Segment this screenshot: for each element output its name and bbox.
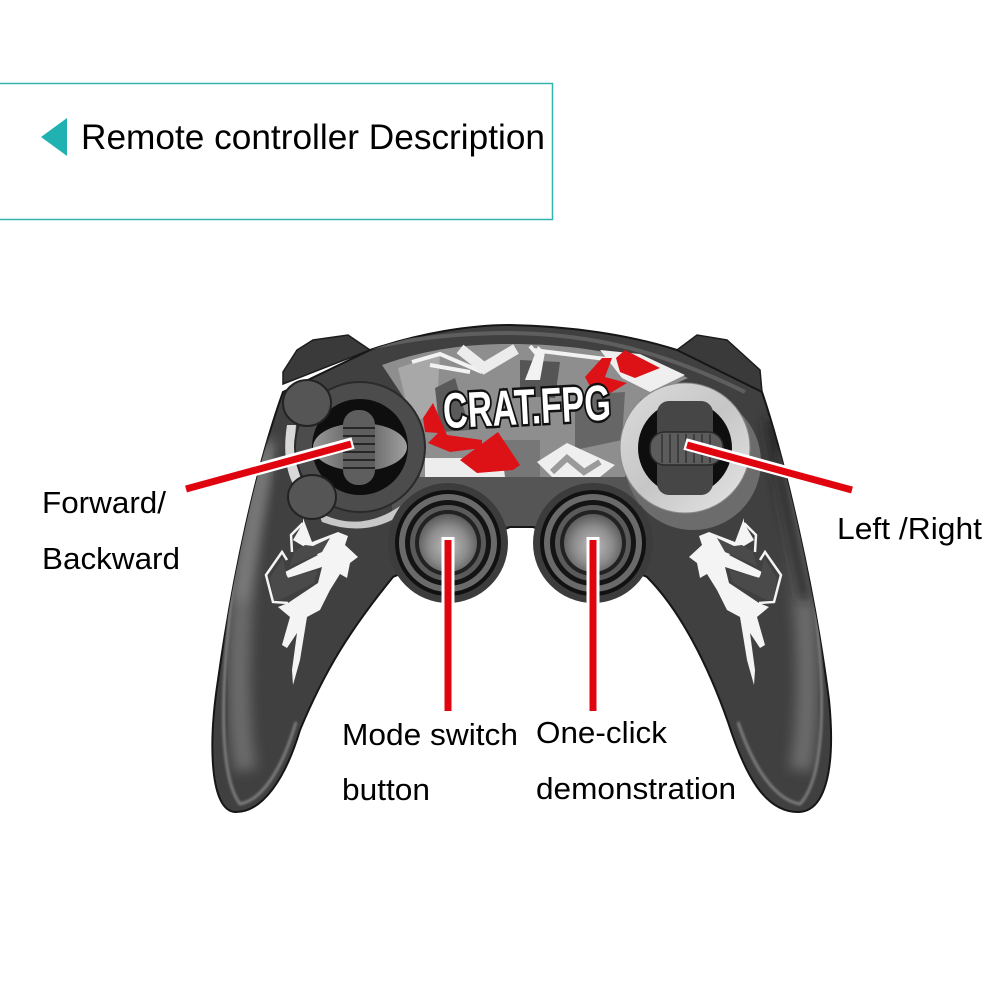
right joystick [533, 483, 653, 603]
left arrow decal [266, 518, 358, 685]
roller wheel [343, 410, 375, 485]
white script lines [412, 346, 630, 372]
left shoulder button [283, 335, 370, 384]
graffiti panel [382, 344, 688, 477]
pointer: forward/backward [186, 443, 353, 489]
pointer: mode switch [442, 537, 454, 711]
title text: Remote controller Description [81, 118, 545, 157]
label: forward/backward: Backward [42, 541, 180, 576]
label: left/right: Left /Right [837, 511, 982, 546]
pointer: left/right [685, 444, 852, 490]
white band [600, 350, 685, 392]
label: one-click demonstration: demonstration [536, 771, 736, 806]
graffiti logo: CRAT.FPG [441, 375, 612, 439]
label: mode switch button: Mode switch [342, 717, 518, 752]
right arrow decal [689, 518, 781, 685]
title panel [0, 84, 552, 220]
grip shading [224, 333, 821, 804]
right dial [620, 383, 761, 530]
label: forward/backward [42, 485, 180, 576]
right shoulder button [677, 335, 762, 392]
label: mode switch button [342, 717, 518, 807]
label: one-click demonstration: One-click [536, 715, 667, 750]
label: one-click demonstration [536, 715, 736, 806]
top V pattern [460, 349, 516, 368]
left joystick [388, 483, 508, 603]
controller illustration [212, 325, 831, 812]
icon: teal triangle [41, 118, 67, 156]
red chevrons [423, 403, 482, 452]
pointer: one-click demonstration [586, 537, 600, 711]
controller body [212, 325, 831, 812]
label: mode switch button: button [342, 772, 430, 807]
label: forward/backward: Forward/ [42, 485, 166, 520]
bottom V pattern [537, 443, 615, 477]
left dial [283, 380, 425, 529]
side paddles [283, 380, 331, 426]
dark pattern shapes [398, 354, 440, 420]
